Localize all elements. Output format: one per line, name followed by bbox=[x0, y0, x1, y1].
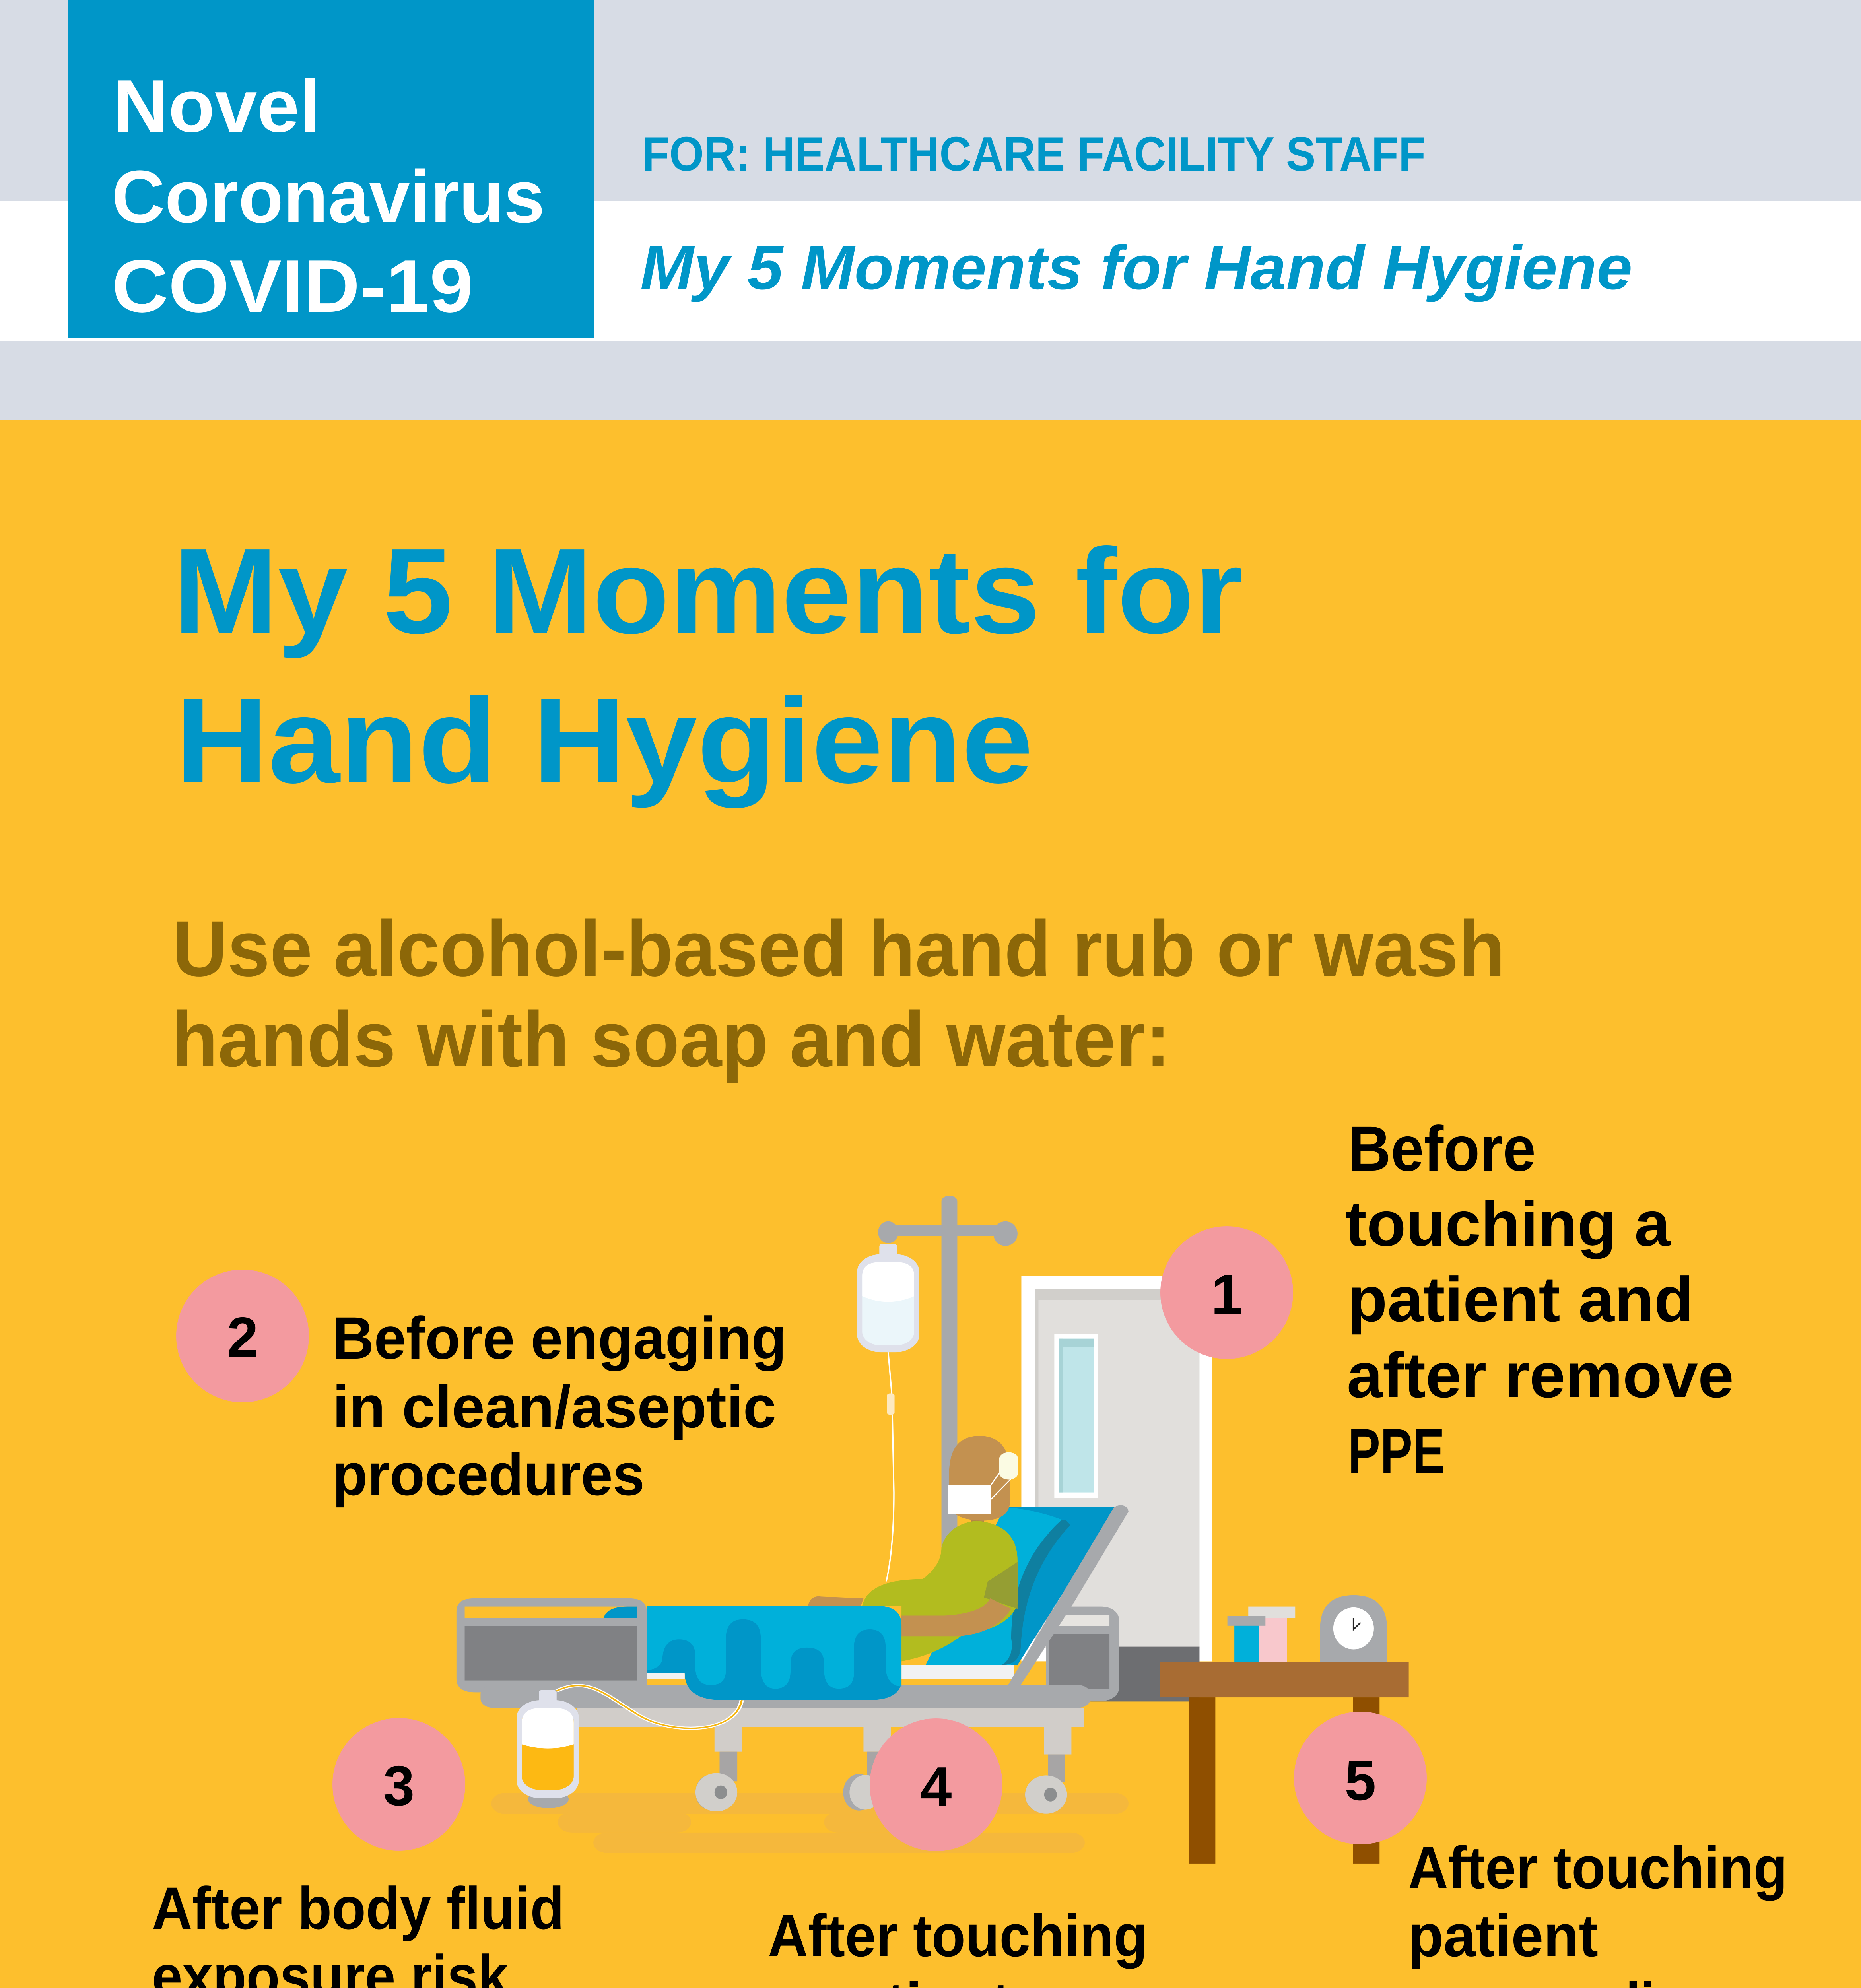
header panel: Novel Coronavirus COVID-19: Coronavirus bbox=[112, 155, 545, 238]
moment 3: badge bbox=[332, 1718, 465, 1851]
moment 2: badge bbox=[176, 1270, 309, 1402]
main title: Hand Hygiene bbox=[175, 673, 1033, 809]
IV bag and line bbox=[857, 1244, 919, 1581]
header subtitle: My 5 Moments for Hand Hygiene bbox=[640, 233, 1632, 303]
moment 1: badge: 1 bbox=[1211, 1263, 1242, 1326]
IV pole bbox=[878, 1196, 1018, 1556]
moment 5: badge: 5 bbox=[1345, 1749, 1376, 1812]
backrest bbox=[926, 1507, 1117, 1665]
door bbox=[1021, 1276, 1212, 1701]
moment 2: text bbox=[332, 1305, 787, 1508]
moment 2: text: in clean/aseptic bbox=[332, 1373, 776, 1440]
instruction text: hands with soap and water: bbox=[171, 995, 1171, 1083]
moment 5: text bbox=[1408, 1834, 1787, 1988]
panel: yellow main bbox=[0, 420, 1861, 1988]
bed headboard at right bbox=[1046, 1607, 1119, 1701]
moment 1: text: after remove bbox=[1347, 1340, 1734, 1411]
patient bbox=[808, 1436, 1018, 1661]
moment 4: badge: 4 bbox=[921, 1755, 952, 1819]
main title: My 5 Moments for bbox=[173, 523, 1243, 660]
wheels bbox=[695, 1773, 1067, 1814]
moment 5: text: After touching bbox=[1408, 1834, 1787, 1901]
moment 1: text: touching a bbox=[1345, 1188, 1671, 1259]
moment 1: text: patient and bbox=[1348, 1264, 1694, 1335]
moment 1: text bbox=[1345, 1113, 1734, 1487]
illustration: patient in hospital bed bbox=[457, 1196, 1409, 1864]
floor shadows bbox=[491, 1793, 1129, 1853]
moment 2: badge: 2 bbox=[227, 1306, 258, 1369]
header panel: Novel Coronavirus COVID-19: Novel bbox=[113, 64, 321, 148]
blanket bbox=[647, 1606, 901, 1700]
header panel: Novel Coronavirus COVID-19: COVID-19 bbox=[112, 245, 473, 328]
moment 3: text: After body fluid bbox=[152, 1875, 564, 1941]
moment 3: text bbox=[152, 1875, 564, 1988]
moment 3: badge: 3 bbox=[383, 1754, 414, 1817]
moment 2: text: Before engaging bbox=[332, 1305, 787, 1371]
bedside table bbox=[1160, 1595, 1409, 1864]
instruction text bbox=[171, 905, 1505, 1083]
moment 4: text: After touching bbox=[768, 1902, 1148, 1969]
moment 2: text: procedures bbox=[332, 1441, 645, 1508]
urine collection bag bbox=[517, 1685, 742, 1808]
moment 5: badge bbox=[1294, 1712, 1427, 1844]
header panel: Novel Coronavirus COVID-19 bbox=[68, 0, 594, 338]
moment 4: badge bbox=[870, 1718, 1002, 1851]
moment 5: text: patient bbox=[1408, 1902, 1598, 1969]
main title bbox=[173, 523, 1243, 809]
instruction text: Use alcohol-based hand rub or wash bbox=[172, 905, 1505, 992]
moment 1: badge bbox=[1160, 1226, 1293, 1359]
bed frame and footboard bbox=[457, 1505, 1129, 1782]
moment 1: text: Before bbox=[1348, 1113, 1536, 1184]
moment 1: text: PPE bbox=[1348, 1415, 1445, 1487]
header band bbox=[0, 201, 1861, 341]
audience heading: FOR: HEALTHCARE FACILITY STAFF bbox=[642, 127, 1426, 181]
